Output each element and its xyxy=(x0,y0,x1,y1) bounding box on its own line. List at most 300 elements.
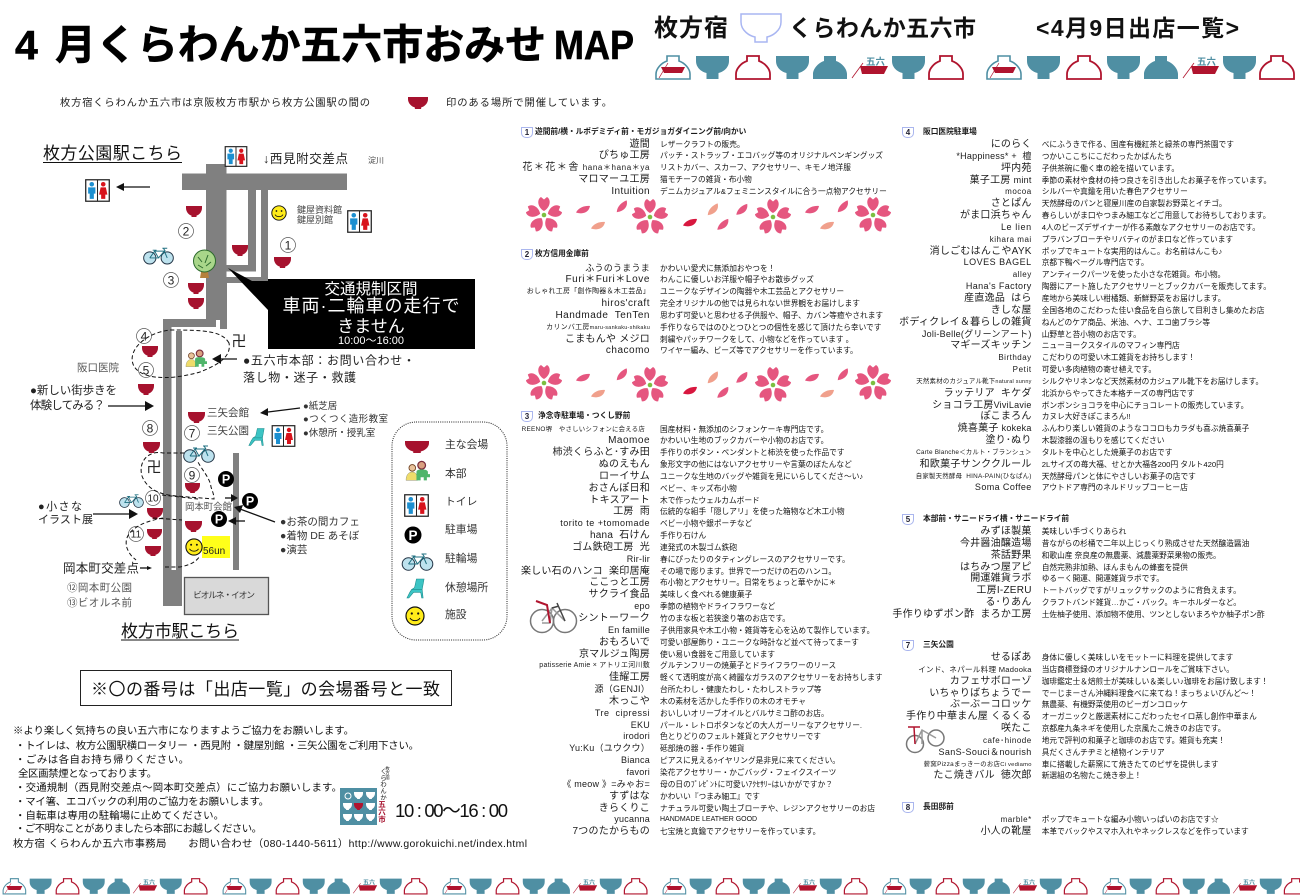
list: venue 4 shops: ポップでキュートな実用的はんこ。お名前はんこも♪ xyxy=(1042,247,1222,256)
list: venue 4 shops: *Happiness* + 檀 xyxy=(956,151,1032,161)
list: venue 3 shops: 春にぴったりのタティングレースのアクセサリーです。 xyxy=(660,555,850,564)
right heading: くらわんか五六市 xyxy=(789,15,976,41)
list: venue 2 shops: 完全オリジナルの他では見られない世界観をお届けします xyxy=(660,299,860,308)
callout: traffic restriction xyxy=(228,268,475,349)
map labels: ●五六市本部：お問い合わせ・ xyxy=(243,354,415,368)
list: venue 5 shops: 今井醤油醸造場 xyxy=(960,538,1032,549)
list: venue 5 shops: 手作りゆずポン酢 まろか工房 xyxy=(892,609,1032,620)
cooperation notes: ・トイレは、枚方公園駅横ロータリー ・西見附 ・鍵屋別館 ・三矢公園をご利用下さい。 xyxy=(15,739,419,752)
circled venue numbers: 4 xyxy=(141,330,148,344)
list: venue 3 shops: ピアスに見えるｩイヤリング是非見に来てください。 xyxy=(660,756,840,765)
list: venue 4 shops: 北浜からやってきた本格チーズの専門店です xyxy=(1042,389,1194,398)
list: venue 4 shops: kihara mai xyxy=(990,235,1032,244)
map labels: 体験してみる？ xyxy=(30,398,105,412)
icon: rest area xyxy=(249,428,264,446)
list: venue 3 shops: 京マルジュ陶房 xyxy=(579,649,650,660)
heading: 8 xyxy=(906,803,910,812)
list: venue 4 shops: さとぱん xyxy=(991,198,1032,209)
icon: parking: P xyxy=(246,494,254,508)
list: venue 3 shops: きらくりこ xyxy=(599,802,650,814)
list: venue 3 shops: ローイサム xyxy=(599,471,650,482)
list: venue 2 shops xyxy=(527,262,883,356)
heading: 7 xyxy=(906,641,910,650)
list: venue 1 shops: ぴちゅ工房 xyxy=(599,150,650,161)
list: venue 3 shops: ナチュラル可愛い陶土ブローチや、レジンアクセサリーのお店 xyxy=(660,804,875,812)
list: venue 7 shops: 珈琲鑑定士＆焙煎士が美味しい＆楽しい♪珈琲をお届け致します！ xyxy=(1042,677,1268,686)
list: venue 3 shops: ベビー小物や銀ポーチなど xyxy=(660,519,752,528)
logo small text: 枚方宿 xyxy=(386,766,390,780)
list: venue 4 shops: カヌレ大好きぽこまろん!! xyxy=(1042,412,1131,421)
title: 4 xyxy=(15,22,38,68)
list: venue 3 shops: 使い易い食器をご用意しています xyxy=(660,650,775,659)
legend: 駐車場 xyxy=(445,522,478,536)
roads xyxy=(163,164,347,606)
circled venue numbers xyxy=(128,224,296,542)
list: venue 4 shops: 季節の素材や食材の持つ良さを引き出したお菓子を作っています。 xyxy=(1042,176,1271,185)
cooperation notes: ※より楽しく気持ちの良い五六市になりますようご協力をお願いします。 xyxy=(13,724,354,737)
station heading south: 枚方市駅こちら xyxy=(121,622,239,641)
list: venue 4 shops: Carte Blanche＜カルト・ブランシュ＞ xyxy=(916,449,1032,456)
list: venue 2 shops: Handmade TenTen xyxy=(555,310,650,321)
list: venue 2 shops: 刺繍やパッチワークをして、小物などを作っています 。 xyxy=(660,335,853,344)
list: venue 2 shops: hiros'craft xyxy=(601,298,650,309)
list: venue 7 shops xyxy=(906,651,1268,781)
list: venue 4 shops: 陶器にアート施したアクセサリーとブックカバーを販売してます。 xyxy=(1042,282,1271,291)
cooperation notes: ・ごみは各自お持ち帰りください。 xyxy=(15,753,189,766)
list: venue 3 shops: 色とりどりのフェルト雑貨とアクセサリーです xyxy=(660,732,821,741)
list: venue 4 shops: 可愛い多肉植物の寄せ植えです。 xyxy=(1042,365,1156,374)
list: venue 4 shops: にのらく xyxy=(991,139,1032,150)
list: venue 3 shops: 木で作ったウェルカムボード xyxy=(660,496,760,505)
heading: 枚方信用金庫前 xyxy=(535,249,589,258)
list: venue 3 shops: ユニークな生地のバッグや雑貨を見にいらしてくださ～い♪ xyxy=(660,472,863,481)
list: venue 3 shops: 伝統的な組手「隠しアリ」を使った箱物など木工小物 xyxy=(660,507,845,516)
list: venue 4 shops: アウトドア専門のネルドリップコーヒー店 xyxy=(1042,483,1188,492)
legend xyxy=(392,422,507,640)
list: venue 2 shops: かわいい愛犬に無添加おやつを！ xyxy=(660,264,775,272)
list: venue 2 shops: ユニークなデザインの陶器や木工芸品とアクセサリー xyxy=(660,287,844,296)
list: venue 3 shops: トキスアート xyxy=(589,495,650,506)
icon: tree xyxy=(194,250,216,278)
cooperation notes: ・マイ箸、エコバックの利用のご協力をお願いします。 xyxy=(15,795,269,808)
list: venue 1 shops: 花＊花＊舎 hana＊hana＊ya xyxy=(522,162,650,173)
list: venue 4 shops: 天然素材のカジュアル靴下natural sunny xyxy=(916,378,1032,385)
bottom bowl pattern strip: 五六 xyxy=(1243,878,1255,886)
list: venue 4 shops: ねんどのケア商品、米油、ヘナ、エコ歯ブラシ等 xyxy=(1042,318,1210,327)
dashed area outlines xyxy=(126,330,229,567)
list: venue 4 shops: アンティークパーツを使った小さな花雑貨。布小物。 xyxy=(1042,270,1225,279)
list: venue 3 shops: おいしいオリーブオイルとバルサミコ酢のお店。 xyxy=(660,709,829,718)
map labels: ●小さな xyxy=(38,500,82,513)
bowl pattern strip xyxy=(656,56,1294,79)
map labels: 鍵屋資料館 xyxy=(297,204,342,215)
map labels: ●演芸 xyxy=(280,543,307,556)
list: venue 3 shops: 源（GENJI） xyxy=(594,684,650,694)
heading xyxy=(902,640,954,651)
heading xyxy=(902,127,977,138)
list: venue 8 shops: 本革でバックやスマホ入れやネックレスなどを作っています xyxy=(1042,827,1249,836)
list: venue 3 shops: 季節の植物やドライフラワーなど xyxy=(660,602,775,611)
list: venue 5 shops: 自然完熟非加熱、ほんまもんの蜂蜜を提供 xyxy=(1042,563,1188,572)
map labels: ⑫岡本町公園 xyxy=(67,581,132,594)
list: venue 3 shops: Maomoe xyxy=(608,435,650,446)
list: venue 2 shops: 思わず可愛いと思わせる子供服や、帽子、カバン等癒やされます xyxy=(660,311,883,320)
map labels: 三矢公園 xyxy=(207,424,249,437)
list: venue 3 shops: 木っこや xyxy=(609,696,650,707)
list: venue 4 shops: タルトを中心とした焼菓子のお店です xyxy=(1042,448,1172,457)
list: venue 4 shops: LOVES BAGEL xyxy=(964,257,1032,267)
building: Biorne Aeon xyxy=(184,578,268,614)
notice box: ※〇の番号は「出店一覧」の会場番号と一致 xyxy=(91,680,440,699)
list: venue 3 shops: シントーワーク xyxy=(578,613,650,624)
icon: bicycles xyxy=(120,248,214,507)
list: venue 5 shops: はちみつ屋アピ xyxy=(960,562,1032,573)
list: venue 4 shops: 天然酵母のパンと寝屋川産の自家製お野菜とイチゴ。 xyxy=(1042,199,1227,208)
list: venue 4 shops: 天然酵母パンと体にやさしいお菓子の店です xyxy=(1042,472,1196,481)
bottom bowl pattern strip: 五六 xyxy=(583,878,595,886)
panel: venue 8 xyxy=(902,802,954,813)
heading: 1 xyxy=(525,128,529,137)
title: MAP xyxy=(554,22,634,68)
map labels: ●着物 DE あそぼ xyxy=(280,529,360,542)
list: venue 3 shops: 竹のまな板と若狭塗り箸のお店です。 xyxy=(660,614,790,623)
legend: 施設 xyxy=(445,608,467,621)
list: venue 3 shops: 美味しく食べれる健康菓子 xyxy=(660,590,752,599)
heading: 三矢公園 xyxy=(923,640,954,649)
bottom bowl pattern strip: 五六 xyxy=(143,878,155,886)
list: venue 3 shops: グルテンフリーの焼菓子とドライフラワーのリース xyxy=(660,661,836,670)
circled venue numbers: 1 xyxy=(285,238,292,252)
list: venue 4 shops: 焼喜菓子 kokeka xyxy=(958,423,1032,434)
bottom bowl pattern strip: 五六 xyxy=(363,878,375,886)
map labels: 鍵屋別館 xyxy=(297,214,333,225)
list: venue 3 shops: 連発式の木製ゴム鉄砲 xyxy=(660,543,737,552)
list: venue 4 shops: mocoa xyxy=(1005,187,1032,196)
intro text with bowl marker: 枚方宿くらわんか五六市は京阪枚方市駅から枚方公園駅の間の xyxy=(60,96,370,109)
list: venue 4 shops: 京都下鴨ベーグル専門店です。 xyxy=(1042,258,1149,267)
map labels: イラスト展 xyxy=(38,513,93,526)
list: venue 7 shops: 咲たこ xyxy=(1001,723,1032,734)
list: venue 3 shops: 台所たわし・健康たわし・たわしストラップ等 xyxy=(660,685,821,694)
logo xyxy=(340,788,377,825)
list: venue 8 shops: 小人の靴屋 xyxy=(980,826,1032,837)
heading xyxy=(521,411,630,422)
legend: トイレ xyxy=(445,496,477,508)
list: venue 3 shops: ベビー、キッズ布小物 xyxy=(660,484,737,493)
list: venue 4 shops: ニューヨークスタイルのマフィン専門店 xyxy=(1042,341,1180,350)
list: venue 7 shops: オーガニックと厳選素材にこだわったセイロ蒸し創作中華まん xyxy=(1042,712,1257,721)
list: venue 3 shops: 柿渋くらふと･すみ田 xyxy=(552,447,650,458)
intro text with bowl marker xyxy=(60,96,612,109)
list: venue 4 shops: 春らしいがま口やつまみ細工などご用意してお待ちしております。 xyxy=(1042,211,1270,220)
panel: venue 2 xyxy=(521,249,589,260)
list: venue 4 shops: ラッテリア キケダ xyxy=(944,388,1032,399)
list: venue 1 shops: レザークラフトの販売。 xyxy=(660,140,745,148)
station heading north: 枚方公園駅こちら xyxy=(43,144,182,163)
list: venue 3 shops: 佳耀工房 xyxy=(609,672,650,683)
list: venue 5 shops: トートバッグですがリュックサックのように背負えます。 xyxy=(1042,586,1241,595)
map labels: ●お茶の間カフェ xyxy=(280,515,360,528)
list: venue 3 shops: torito te +tomomade xyxy=(560,518,650,528)
list: venue 5 shops: 和歌山産 奈良産の無農薬、減農薬野菜果物の販売。 xyxy=(1042,551,1221,560)
list: venue 7 shops: たこ焼きバル 徳次郎 xyxy=(933,770,1032,781)
bottom bowl pattern strip: 五六 xyxy=(803,878,815,886)
panel: venue 5 xyxy=(902,514,1069,525)
list: venue 5 shops: ゆるーく開運、開運雑貨ラボです。 xyxy=(1042,574,1164,583)
list: venue 7 shops: 身体に優しく美味しいをモットーに料理を提供してます xyxy=(1042,653,1233,662)
list: venue 7 shops: SanS-Souci＆nourish xyxy=(938,747,1032,757)
heading: 長田邸前 xyxy=(923,802,954,811)
bottom bowl pattern strip xyxy=(2,878,1300,894)
circled venue numbers: 7 xyxy=(189,426,196,440)
callout: traffic restriction: 10:00～16:00 xyxy=(338,335,404,347)
list: venue 7 shops: せるぽあ xyxy=(991,652,1032,663)
right heading xyxy=(654,14,1239,42)
list: venue 4 shops: Le lien xyxy=(1001,222,1032,232)
map labels: 淀川 xyxy=(368,155,384,165)
heading: 阪口医院駐車場 xyxy=(923,127,977,136)
list: venue 2 shops: ワイヤー編み、ビーズ等でアクセサリーを作っています。 xyxy=(660,346,858,355)
callout: traffic restriction: 交通規制区間 xyxy=(324,280,418,298)
list: venue 4 shops: 2Lサイズの苺大福、せとか大福各200円 タルト420円 xyxy=(1042,460,1224,469)
list: venue 4 shops: ショコラ工房ViviLavie xyxy=(932,400,1032,411)
list: venue 3 shops: 工房 雨 xyxy=(613,506,650,517)
list: venue 4 shops: 菓子工房 mint xyxy=(970,175,1032,186)
right heading: 枚方宿 xyxy=(654,15,728,42)
list: venue 3 shops: REENO堺 やさしいシフォンに会える店 xyxy=(522,426,645,432)
list: venue 3 shops: かわいい生地のブックカバーや小物のお店です。 xyxy=(660,436,828,445)
list: venue 1 shops: デニムカジュアル&フェミニンスタイルに合う一点物アクセサリー xyxy=(660,187,887,196)
list: venue 5 shops: る･りあん xyxy=(985,597,1032,608)
list: venue 3 shops: ここっと工房 xyxy=(589,577,650,588)
heading: 5 xyxy=(906,515,910,524)
list: venue 3 shops: favori xyxy=(626,767,650,777)
heading: 本部前・サニードライ横・サニードライ前 xyxy=(923,514,1069,523)
list: venue 2 shops: ふうのうまうま xyxy=(585,262,650,272)
building: Biorne Aeon: ビオルネ・イオン xyxy=(193,590,255,600)
circled venue numbers: 2 xyxy=(183,224,190,238)
icon: grey bicycle xyxy=(906,726,945,754)
map labels: ↓西見附交差点 xyxy=(263,152,348,166)
list: venue 3 shops: 楽しい石のハンコ 楽印居庵 xyxy=(521,566,650,577)
list: venue 3 shops: 手作り石けん xyxy=(660,531,706,540)
right heading: <4月9日出店一覧> xyxy=(1036,15,1239,41)
map labels: 阪口医院 xyxy=(77,362,119,374)
list: venue 4 shops: プラバンブローチやリバティのがま口など作っています xyxy=(1042,235,1233,244)
heading: 浄念寺駐車場・つくし野前 xyxy=(538,411,630,420)
map arrows xyxy=(93,183,300,570)
list: venue 4 shops: ふんわり楽しい雑貨のようなココロもカラダも喜ぶ焼喜菓子 xyxy=(1042,424,1249,433)
intro text with bowl marker: 印のある場所で開催しています。 xyxy=(446,96,612,109)
list: venue 3 shops: ぬのえもん xyxy=(599,459,650,470)
legend: 駐輪場 xyxy=(445,551,478,565)
list: venue 3 shops: すずはな xyxy=(609,791,650,802)
list: venue 4 shops: 木製漆器の温もりを感じてください xyxy=(1042,436,1164,445)
list: venue 3 shops: hana 石けん xyxy=(590,530,650,541)
icon: toilets xyxy=(86,147,371,446)
panel: venue 3 xyxy=(521,411,630,422)
list: venue 7 shops: 当店商標登録のオリジナルナンロールをご賞味下さい。 xyxy=(1042,665,1234,674)
heading: 遊間前/横・ルポデミディ前・モガジョガダイニング前/向かい xyxy=(535,127,746,136)
list: venue 4 shops xyxy=(899,138,1271,492)
callout: traffic restriction: 車両·二輪車の走行で xyxy=(282,296,460,316)
map panel xyxy=(30,144,508,641)
list: venue 1 shops: Intuition xyxy=(611,186,650,197)
list: venue 2 shops: わんこに優しいお洋服や帽子やお散歩グッズ xyxy=(660,275,814,284)
list: venue 4 shops: 山野草と苔小物のお店です。 xyxy=(1042,330,1141,338)
list: venue 5 shops: みずほ製菓 xyxy=(980,526,1032,537)
list: venue 7 shops: 地元で評判の和菓子と珈琲のお店です。雑貨も充実！ xyxy=(1042,736,1225,745)
list: venue 7 shops: 具だくさんチヂミと植物インテリア xyxy=(1042,748,1165,757)
bowl pattern strip: 五六 xyxy=(1197,56,1216,68)
list: venue 3 shops: ゴム鉄砲工房 光 xyxy=(572,542,650,553)
logo wordmark: くらわんか 五六市 xyxy=(378,768,386,823)
list: venue 4 shops: がま口浜ちゃん xyxy=(960,210,1032,221)
circled venue numbers: 5 xyxy=(143,364,150,378)
list: venue 4 shops: Soma Coffee xyxy=(975,482,1032,492)
map labels: ●つくつく造形教室 xyxy=(303,413,388,425)
list: venue 3 shops: サクライ食品 xyxy=(588,589,650,600)
icon: parking: P xyxy=(215,512,223,526)
map labels: ⑬ビオルネ前 xyxy=(67,596,132,609)
temple marks: 卍 xyxy=(231,333,247,350)
list: venue 3 shops: Yu:Ku（ユウクウ） xyxy=(569,743,650,753)
list: venue 5 shops: 茶話野果 xyxy=(991,550,1032,561)
list: venue 1 shops: 遊間 xyxy=(630,138,650,150)
list: venue 3 shops: パール・レトロボタンなどの大人ガーリーなアクセサリー. xyxy=(660,721,862,730)
panel: venue 4 xyxy=(902,127,977,138)
list: venue 7 shops: インド、ネパール料理 Madooka xyxy=(918,665,1032,674)
list: venue 3 shops: 布小物とアクセサリー。日常をちょっと華やかに＊ xyxy=(660,578,836,587)
list: venue 4 shops: 子供茶碗に働く車の絵を描いています。 xyxy=(1042,164,1179,173)
venue bowls xyxy=(138,206,291,556)
heading: 2 xyxy=(525,250,529,259)
cooperation notes xyxy=(13,724,527,850)
list: venue 4 shops: 産地から美味しい柑橘類、新鮮野菜をお届けします。 xyxy=(1042,294,1225,303)
cherry blossom band 1 xyxy=(526,197,891,234)
list: venue 7 shops: ぶーぶーコロッケ xyxy=(950,699,1032,710)
list: venue 4 shops: 産直逸品 はら xyxy=(964,293,1032,304)
bottom bowl pattern strip: 五六 xyxy=(1023,878,1035,886)
list: venue 4 shops: Birthday xyxy=(998,353,1032,362)
list: venue 3 shops: Tre cipressi xyxy=(595,708,650,718)
list: venue 3 shops: HANDMADE LEATHER GOOD xyxy=(660,816,757,823)
list: venue 4 shops: 塗り･ぬり xyxy=(985,435,1032,446)
icon: headquarters xyxy=(186,350,207,367)
list: venue 4 shops: Petit xyxy=(1013,365,1032,374)
list: venue 7 shops: でーじまーさん沖縄料理食べに来てね！まっちょいびんど～！ xyxy=(1042,689,1256,698)
list: venue 3 shops: yucanna xyxy=(614,814,650,824)
list: venue 3 shops: 子供用家具や木工小物・雑貨等を心を込めて製作しています。 xyxy=(660,626,874,635)
legend: P xyxy=(408,528,418,543)
list: venue 8 shops xyxy=(980,815,1249,837)
list: venue 3 shops: 母の日のﾌﾟﾚｾﾞﾝﾄに可愛いｱｸｾｻﾘｰはいかがですか？ xyxy=(660,780,833,789)
list: venue 8 shops: ポップでキュートな編み小物いっぱいのお店です☆ xyxy=(1042,815,1219,824)
list: venue 4 shops: マギーズキッチン xyxy=(950,340,1032,351)
list: venue 7 shops: cafe･hinode xyxy=(983,736,1032,745)
list: venue 4 shops: alley xyxy=(1013,270,1032,279)
list: venue 5 shops: クラフトバンド雑貨…かご・バック。キーホルダーなど。 xyxy=(1042,598,1241,607)
legend: 休憩場所 xyxy=(445,580,488,594)
callout: traffic restriction: きません xyxy=(337,317,405,336)
cooperation notes: ・交通規制（西見附交差点～岡本町交差点）にご協力お願いします。 xyxy=(15,781,342,794)
icon: parking xyxy=(211,471,258,527)
list: venue 3 shops: 手作りのボタン・ペンダントと柿渋を使った作品です xyxy=(660,448,845,457)
list: venue 4 shops: シルバーや真鍮を用いた春色アクセサリー xyxy=(1042,187,1188,196)
icon: parking: P xyxy=(222,472,230,486)
map labels: ●休憩所・授乳室 xyxy=(303,427,375,439)
circled venue numbers: 8 xyxy=(147,422,154,436)
map labels: 岡本町交差点 xyxy=(63,562,139,576)
list: venue 1 shops xyxy=(522,138,887,197)
list: venue 7 shops: 京都産九条ネギを使用した京風たこ焼きのお店です。 xyxy=(1042,724,1225,733)
opening hours: 10 : 00～16 : 00 xyxy=(395,800,508,821)
temple marks: 卍 xyxy=(146,459,162,476)
circled venue numbers: 3 xyxy=(168,274,175,288)
list: venue 8 shops: marble* xyxy=(1001,815,1032,824)
list: venue 3 shops xyxy=(521,424,883,837)
list: venue 7 shops: 車に搭載した薪窯にて焼きたてのピザを提供します xyxy=(1042,760,1219,769)
heading: 3 xyxy=(525,412,529,421)
list: venue 3 shops: 国産材料・無添加のシフォンケーキ専門店です。 xyxy=(660,424,828,434)
list: venue 2 shops: chacomo xyxy=(606,345,650,356)
list: venue 7 shops: 新選組の名物たこ焼き参上！ xyxy=(1042,771,1142,780)
list: venue 4 shops: きしな屋 xyxy=(991,305,1032,316)
map labels xyxy=(30,152,415,609)
map labels: 落し物・迷子・救護 xyxy=(243,370,356,384)
title: 月くらわんか五六市おみせ xyxy=(55,22,546,68)
list: venue 5 shops: 昔ながらの杉桶で二年以上じっくり熟成させた天然醸造醤油 xyxy=(1042,539,1249,548)
list: venue 3 shops: おさんぽ日和 xyxy=(588,483,650,494)
list: venue 3 shops: 砥部焼の器・手作り雑貨 xyxy=(660,744,745,753)
list: venue 5 shops: 工房I-ZERU xyxy=(976,585,1032,596)
list: venue 5 shops: 開運雑貨ラボ xyxy=(970,573,1032,584)
logo and hours xyxy=(340,766,508,825)
list: venue 3 shops: その場で彫ります。世界で一つだけの石のハンコ。 xyxy=(660,567,836,576)
heading: 4 xyxy=(906,128,910,137)
cooperation notes: ・ご不明なことがありましたら本部にお越しください。 xyxy=(15,822,262,835)
cooperation notes: 枚方宿 くらわんか五六市事務局 お問い合わせ（080-1440-5611）http://www.gorokuichi.net/index.html xyxy=(13,837,527,850)
circled venue numbers: 11 xyxy=(131,530,142,540)
list: venue 3 shops: Bianca xyxy=(621,755,650,765)
list: venue 3 shops: irodori xyxy=(623,731,650,741)
list: venue 4 shops: 和欧菓子サンククルール xyxy=(920,459,1032,470)
icon: red bicycle xyxy=(530,600,578,634)
legend: 本部 xyxy=(445,466,467,480)
list: venue 1 shops: パッチ・ストラップ・エコバッグ等のオリジナルペンギングッズ xyxy=(660,151,883,160)
cooperation notes: ・自転車は専用の駐輪場に止めてください。 xyxy=(15,809,224,822)
list: venue 3 shops: patisserie Amie × アトリエ河川敷 xyxy=(539,662,650,669)
list: venue 4 shops: 坪内苑 xyxy=(1001,163,1032,174)
list: venue 3 shops: epo xyxy=(634,601,650,611)
heading xyxy=(521,249,589,260)
list: venue 7 shops: 手作り中華まん屋 くるくる xyxy=(906,711,1032,722)
list: venue 3 shops: 可愛い部屋飾り・ユニークな時計など並べて待ってまーす xyxy=(660,638,859,647)
circled venue numbers: 10 xyxy=(147,494,159,504)
bowl pattern strip: 五六 xyxy=(866,56,886,68)
list: venue 1 shops: 猫モチーフの雑貨・布小物 xyxy=(660,175,752,184)
list: venue 1 shops: リストカバー、スカーフ、アクセサリー、キモノ地洋服 xyxy=(660,163,851,172)
heading xyxy=(902,802,954,813)
circled venue numbers: 9 xyxy=(189,468,196,482)
list: venue 3 shops: 軽くて透明度が高く綺麗なガラスのアクセサリーをお持ちします xyxy=(660,673,883,682)
list: venue 3 shops: EKU xyxy=(631,720,650,730)
notice box xyxy=(80,670,452,706)
list: venue 7 shops: いちゃりばちょうでー xyxy=(929,688,1032,699)
icon: facility smileys: 56un xyxy=(203,546,225,557)
list: venue 2 shops: カリンバ工房maru-sankaku-shikaku xyxy=(546,324,650,331)
panel: venue 1 xyxy=(521,126,746,138)
